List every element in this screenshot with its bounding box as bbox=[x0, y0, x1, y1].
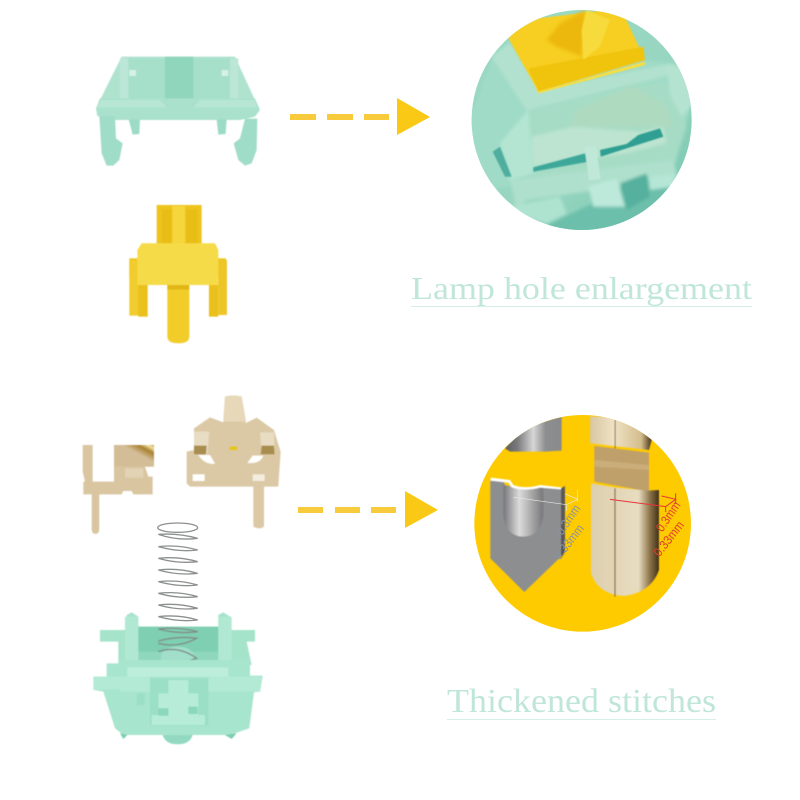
terminal contact: left metal piece bbox=[83, 445, 154, 534]
infographic canvas bbox=[82, 10, 752, 745]
zoom circle: thickened stitches close-up: 0.33mm bbox=[651, 519, 687, 559]
switch top housing bbox=[96, 57, 260, 166]
switch yellow stem bbox=[129, 205, 227, 343]
zoom circle: thickened stitches close-up: 0.3mm bbox=[553, 502, 583, 538]
zoom circle: thickened stitches close-up: 0.33mm bbox=[551, 522, 587, 562]
arrow: top dashed arrow bbox=[290, 98, 430, 135]
zoom circle: lamp hole close-up bbox=[472, 10, 692, 230]
zoom circle: thickened stitches close-up bbox=[474, 415, 691, 632]
terminal contact: right metal piece bbox=[187, 395, 281, 528]
switch bottom housing bbox=[93, 612, 263, 744]
caption: Thickened stitches: Thickened stitches bbox=[447, 683, 716, 720]
spring bbox=[158, 523, 198, 621]
zoom circle: thickened stitches close-up: 0.3mm bbox=[653, 499, 683, 534]
arrow: bottom dashed arrow bbox=[298, 491, 438, 528]
caption: Lamp hole enlargement: Lamp hole enlargement bbox=[411, 270, 752, 306]
